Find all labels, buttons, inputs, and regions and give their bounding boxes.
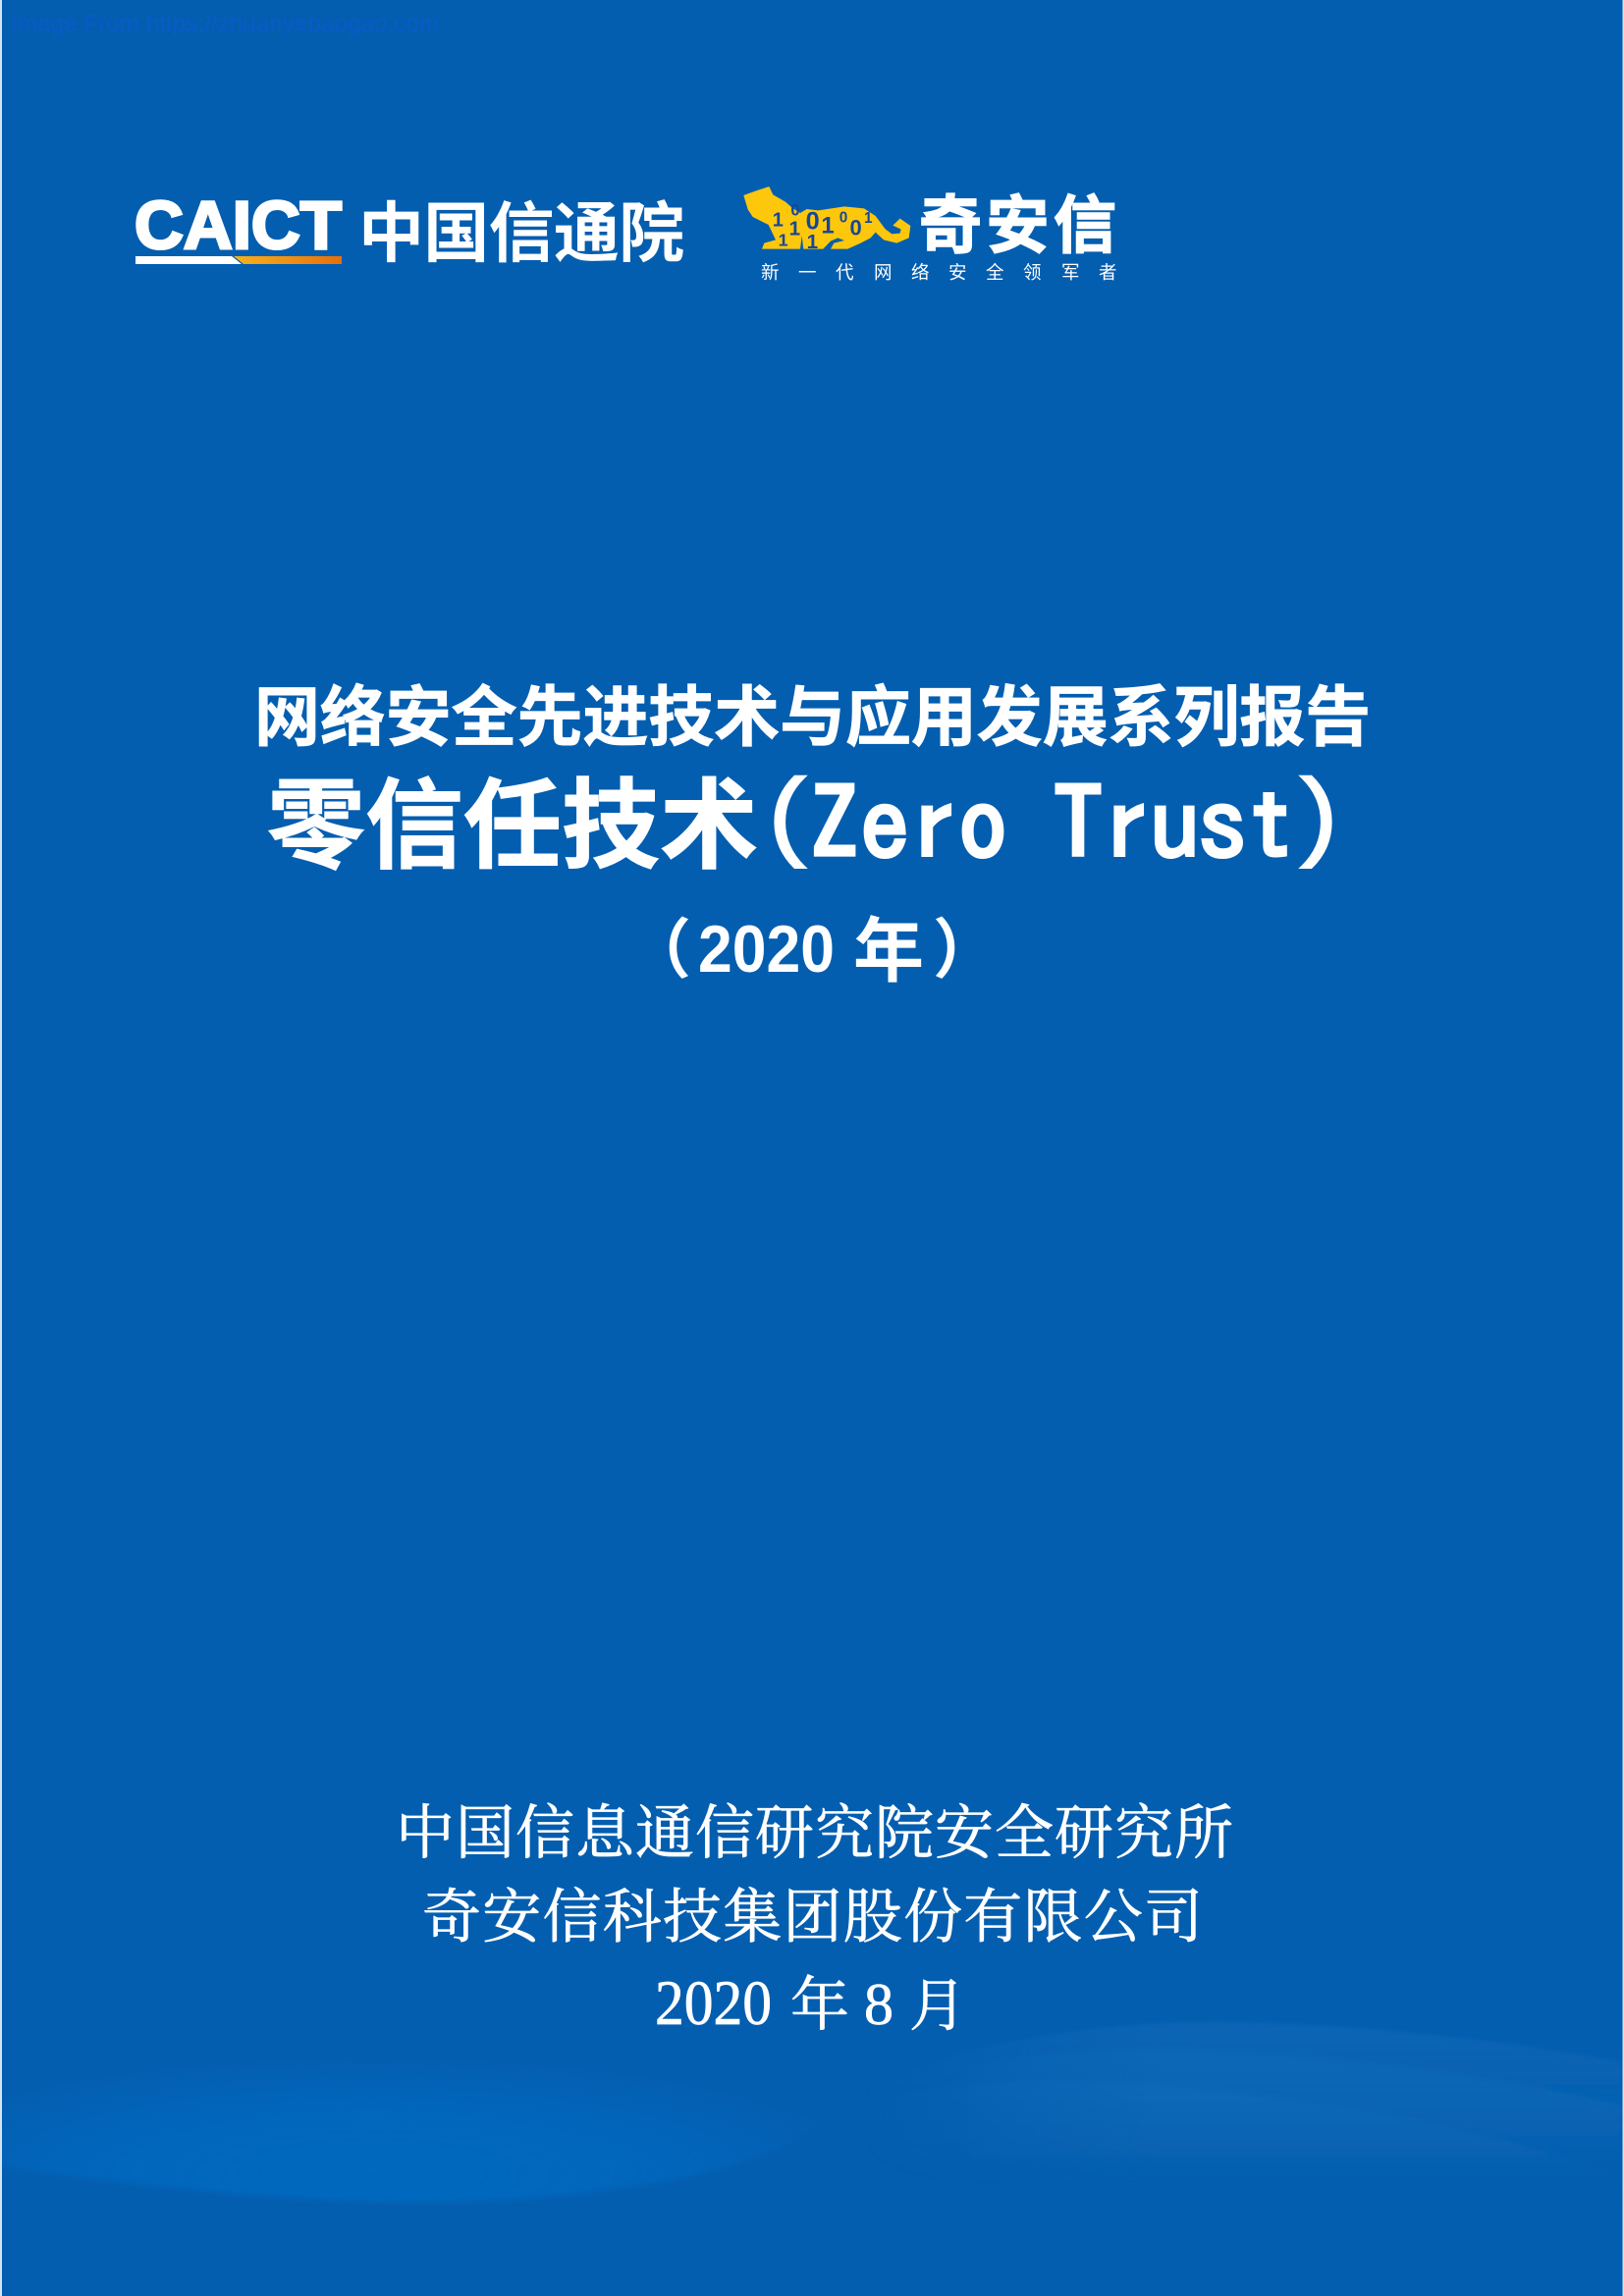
publisher: CAICT institute: 中国信息通信研究院安全研究所 xyxy=(396,1801,1234,1866)
tiger binary digits: 0 xyxy=(790,201,800,220)
publication date: 年 xyxy=(790,1973,849,2038)
logo wordmark: CAICT xyxy=(135,187,342,263)
publisher: Qi An Xin: 奇安信科技集团股份有限公司 xyxy=(422,1885,1204,1949)
logo: tiger icon xyxy=(743,187,910,253)
left wave xyxy=(0,2047,884,2202)
publication date: 月 xyxy=(909,1974,966,2038)
logo underline bar xyxy=(135,256,342,264)
title: main heading: Trust) xyxy=(1053,773,1345,873)
tiger binary digits xyxy=(773,201,873,253)
title: series name: 网络安全先进技术与应用发展系列报告 xyxy=(254,681,1371,755)
right wave bands xyxy=(1061,2050,1440,2124)
title: year: （ xyxy=(626,913,691,986)
publication date: 2020 xyxy=(655,1968,772,2039)
title: main heading: (Zero xyxy=(760,773,1007,873)
logo: CAICT xyxy=(135,187,342,264)
publication date xyxy=(655,1968,966,2039)
title: main heading xyxy=(267,772,1345,881)
logo: 中国信通院: 中国信通院 xyxy=(358,197,683,271)
title: main heading: 零信任技术 xyxy=(267,772,758,881)
background waves xyxy=(33,2050,1440,2201)
title: year: 2020 xyxy=(698,912,835,987)
tiger binary digits: 1 xyxy=(773,210,784,232)
title: year: 年 xyxy=(853,913,924,991)
title: year: ） xyxy=(933,913,998,986)
tiger binary digits: 1 xyxy=(864,210,873,227)
tiger binary digits: 0 xyxy=(839,209,847,226)
watermark: Image From https://zhuanyebaogao.com xyxy=(11,11,439,37)
title: year xyxy=(626,912,998,991)
logo tagline: 新一代网络安全领军者 xyxy=(761,262,1117,283)
tiger binary digits: 1 xyxy=(821,213,835,240)
tiger binary digits: 0 xyxy=(850,215,862,240)
tiger binary digits: 1 xyxy=(779,230,788,249)
tiger binary digits: 1 xyxy=(789,218,800,240)
logo: 奇安信: 奇安信 xyxy=(919,190,1121,261)
publication date: 8 xyxy=(864,1972,893,2037)
tiger binary digits: 0 xyxy=(806,208,820,236)
tiger binary digits: 1 xyxy=(807,231,818,253)
